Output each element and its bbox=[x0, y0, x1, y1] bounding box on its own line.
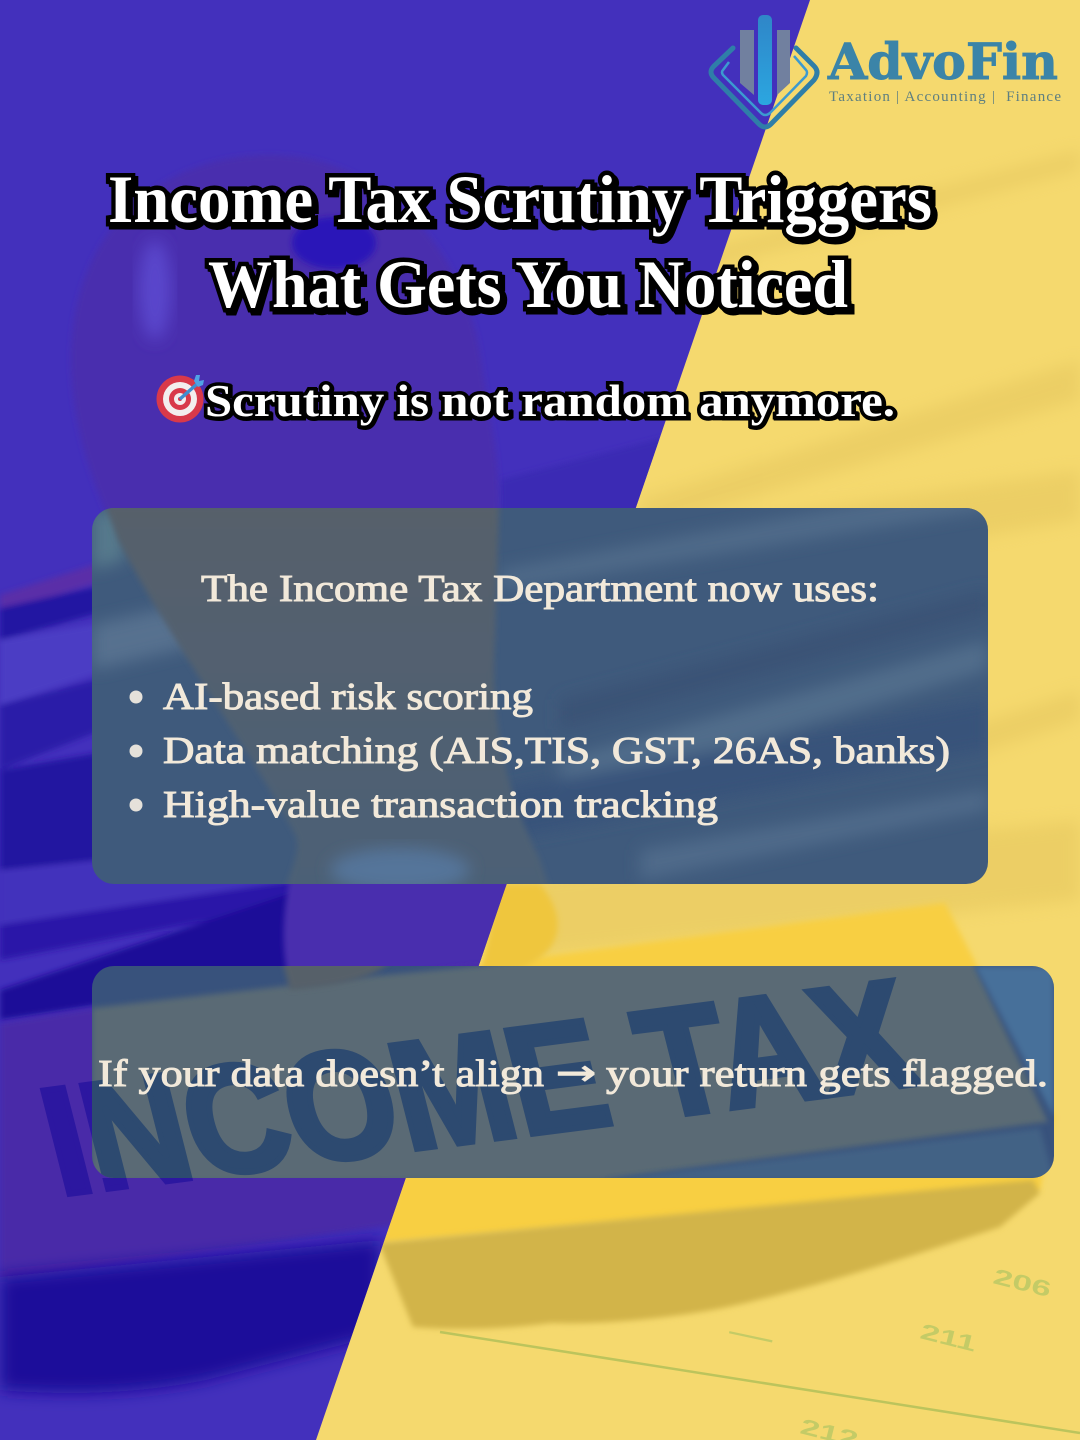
icon: target with dart bbox=[156, 375, 204, 422]
arrow: → bbox=[555, 1053, 597, 1094]
bullet list bbox=[130, 676, 950, 826]
stamp ball through panel bbox=[282, 966, 386, 988]
handle hole bbox=[292, 217, 376, 269]
warning text bbox=[98, 1053, 1048, 1095]
blue half scene bbox=[0, 0, 810, 1440]
ledger numbers: 206 bbox=[991, 1264, 1054, 1302]
logo wordmark: AdvoFin bbox=[827, 32, 1058, 91]
stamp handle bbox=[72, 156, 507, 966]
subtitle: Scrutiny is not random anymore. bbox=[205, 375, 895, 426]
title: Income Tax Scrutiny Triggers bbox=[108, 161, 932, 237]
subtitle: Scrutiny is not random anymore. bbox=[206, 376, 896, 427]
ledger numbers: — bbox=[727, 1319, 775, 1352]
blue patch on handle bbox=[330, 848, 470, 892]
panel: warning bbox=[92, 966, 1054, 1178]
title: What Gets You Noticed bbox=[208, 246, 848, 322]
stamp block side bbox=[0, 1007, 406, 1278]
stamp handle seen through panel bbox=[105, 505, 550, 890]
block shadow side bbox=[379, 1180, 1040, 1329]
warning text: If your data doesn’t align bbox=[98, 1053, 544, 1095]
panel heading: The Income Tax Department now uses: bbox=[201, 568, 879, 610]
stamp ball on yellow bbox=[480, 884, 558, 975]
stamp lettering through panel: INCOME TAX bbox=[26, 948, 930, 1228]
stamp lettering outside panel: INCOME TAX bbox=[26, 948, 930, 1228]
logo mark bbox=[711, 15, 817, 127]
yellow half scene bbox=[379, 150, 1080, 1440]
bullet list: High-value transaction tracking bbox=[163, 784, 718, 826]
title bbox=[108, 161, 935, 325]
warning text: your return gets flagged. bbox=[606, 1053, 1048, 1095]
panel: data sources bbox=[92, 480, 988, 892]
logo tagline: Taxation | Accounting | Finance bbox=[829, 89, 1061, 105]
bullet list: Data matching (AIS,TIS, GST, 26AS, banks) bbox=[163, 730, 950, 772]
ledger numbers bbox=[727, 1264, 1054, 1440]
title: What Gets You Noticed bbox=[211, 249, 851, 325]
logo: AdvoFin bbox=[711, 15, 1061, 127]
handle highlight bbox=[139, 240, 171, 340]
title: Income Tax Scrutiny Triggers bbox=[111, 164, 935, 240]
bullet list: AI-based risk scoring bbox=[163, 676, 533, 718]
ledger numbers: 211 bbox=[918, 1319, 979, 1357]
